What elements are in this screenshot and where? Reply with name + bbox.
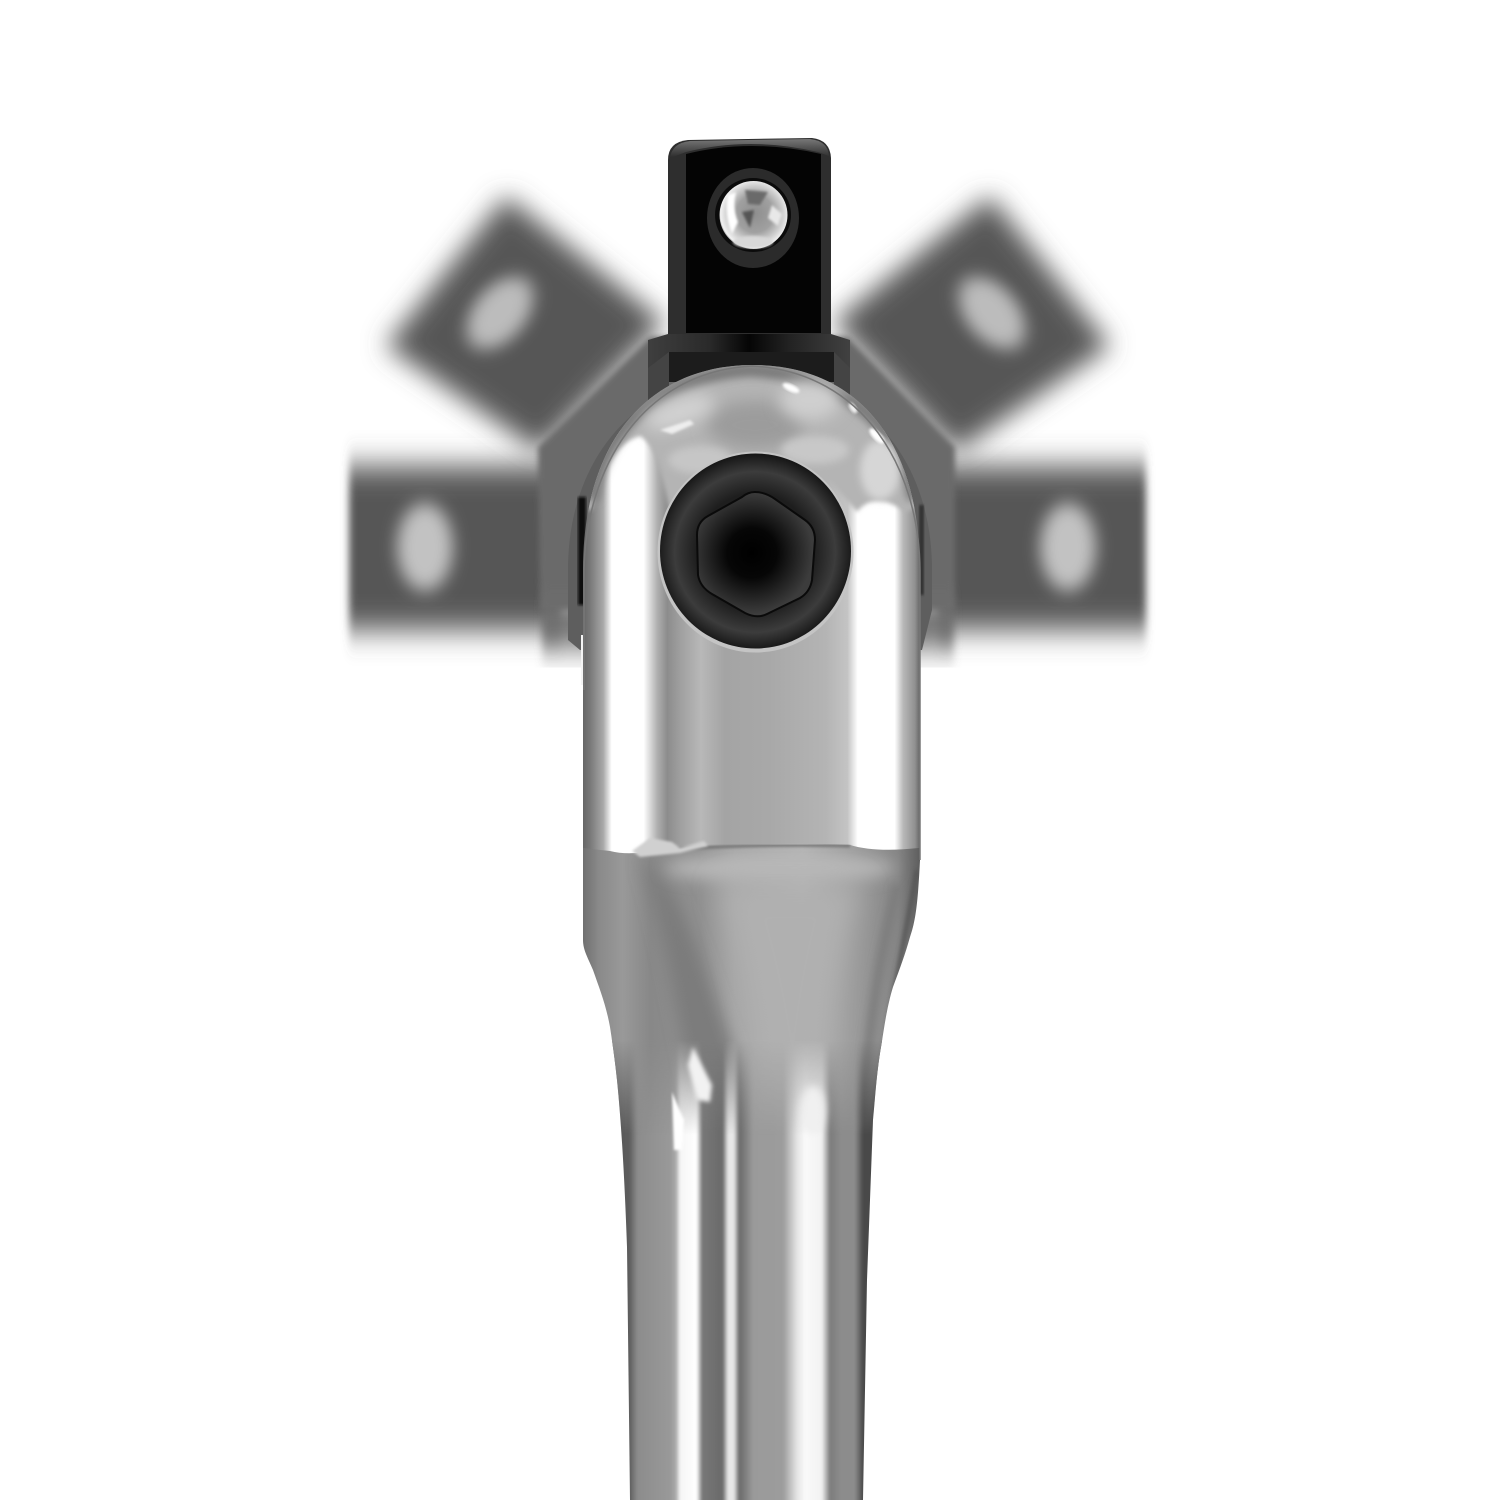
- backing lower fade: [542, 600, 954, 648]
- ghost socket: right horizontal: [938, 466, 1146, 630]
- illustration: chrome ratchet with swinging socket motion blur: [343, 138, 1152, 1500]
- collar step shadow: [669, 352, 834, 382]
- handle shaft: [612, 1039, 882, 1500]
- dome grey mottling: [707, 401, 803, 449]
- neck right edge line: [888, 872, 918, 1006]
- detent ball recess: [707, 168, 799, 268]
- chrome body: [570, 350, 935, 1500]
- hex socket: [697, 492, 815, 616]
- black sliver left: [578, 497, 586, 605]
- dome white highlight glints: [782, 382, 800, 394]
- barrel bottom glint: [632, 838, 708, 857]
- square drive: [668, 138, 831, 340]
- neck dark diagonal reflection: [654, 880, 744, 1115]
- socket opening highlight: right horizontal: [1040, 503, 1096, 591]
- drive front face: [686, 146, 821, 333]
- dark sliver right: [919, 505, 924, 595]
- socket opening highlight: upper right: [945, 264, 1039, 362]
- drive top chamfer: [670, 139, 829, 158]
- neck centre glow: [828, 891, 858, 958]
- head dome: [588, 365, 914, 513]
- ghost socket: upper left diagonal: [386, 196, 664, 452]
- neck: [583, 844, 920, 1128]
- blurred rotating head backing: [538, 337, 955, 648]
- rubber ring: [660, 454, 851, 648]
- socket opening highlight: left horizontal: [397, 503, 453, 591]
- head barrel: [570, 430, 935, 857]
- pivot screw: [658, 452, 854, 652]
- body left and right edge lines: [584, 366, 920, 860]
- neck white flares above handle: [672, 1047, 825, 1150]
- white sliver at lower left of the head: [581, 635, 583, 685]
- socket opening highlight: upper left: [453, 264, 547, 362]
- head shell behind chrome: [568, 372, 932, 685]
- ghost socket: upper right diagonal: [834, 196, 1110, 452]
- ghost socket: left horizontal: [349, 466, 561, 630]
- dome shoulder shading: [592, 370, 914, 500]
- neck upper light band: [665, 854, 895, 882]
- detent ball: [720, 181, 788, 249]
- barrel bottom shadow line: [679, 844, 852, 850]
- drive collar: [648, 334, 850, 405]
